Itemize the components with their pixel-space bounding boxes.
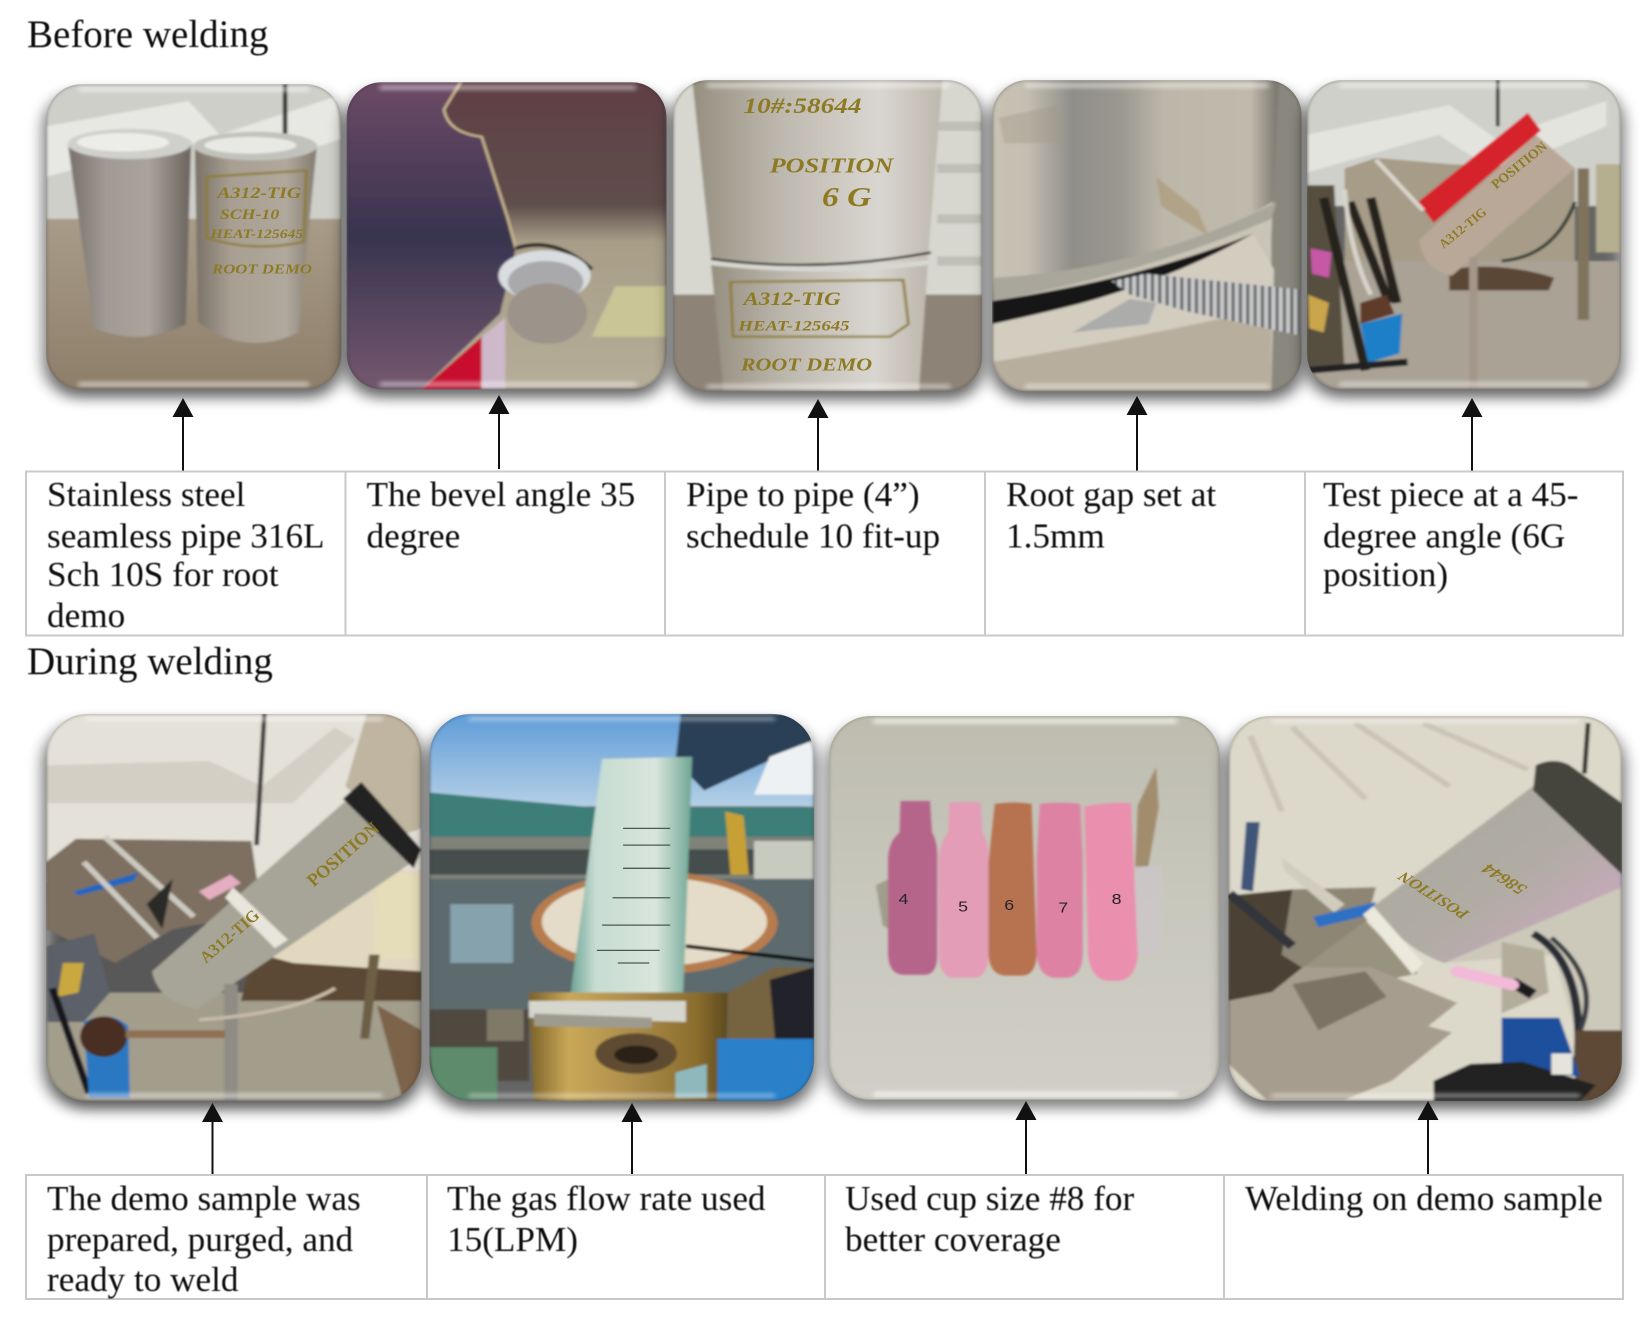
photo: ceramic cups 4 to 8	[827, 716, 1222, 1108]
cell: welding on demo	[1224, 1175, 1623, 1299]
cell: bevel angle	[346, 472, 665, 636]
cell: root gap: 1.5mm	[1006, 516, 1105, 556]
table: during welding captions	[26, 1175, 1623, 1299]
cell: cup size: Used cup size #8 for	[845, 1179, 1135, 1218]
arrow: cup size	[1016, 1101, 1036, 1174]
cell: stainless steel pipe: seamless pipe 316L	[47, 516, 325, 556]
arrow: demo sample	[202, 1103, 223, 1175]
arrow: fit-up	[808, 399, 828, 471]
table: before welding captions	[26, 472, 1623, 636]
photo: welding on demo sample	[1226, 716, 1624, 1109]
photo: demo sample prepared: POSITION	[301, 819, 387, 891]
photo: pipe to pipe fit-up: HEAT-125645	[737, 317, 850, 334]
cell: cup size: better coverage	[845, 1220, 1061, 1259]
cell: fit-up: Pipe to pipe (4”)	[686, 475, 920, 514]
cell: bevel angle: degree	[366, 516, 460, 556]
photo: stainless steel pipes	[44, 84, 343, 398]
cell: gas flow rate: The gas flow rate used	[447, 1179, 766, 1218]
cell: stainless steel pipe: Stainless steel	[47, 475, 246, 514]
cell: fit-up: schedule 10 fit-up	[686, 516, 940, 556]
arrow: root gap	[1126, 396, 1148, 471]
photo: ceramic cups 4 to 8: 6	[1004, 898, 1014, 914]
photo: ceramic cups 4 to 8: 8	[1112, 892, 1122, 908]
arrow: pipes	[172, 398, 194, 471]
photo: bevel angle gauge	[345, 82, 669, 398]
cell: cup size	[825, 1175, 1224, 1299]
photo: pipe to pipe fit-up: ROOT DEMO	[740, 355, 872, 375]
photo: pipe to pipe fit-up: 6 G	[822, 182, 871, 212]
cell: gas flow rate	[427, 1175, 825, 1299]
photo: stainless steel pipes: ROOT DEMO	[211, 262, 312, 277]
photo: pipe to pipe fit-up: POSITION	[769, 155, 894, 178]
arrow: bevel	[488, 395, 510, 469]
cell: stainless steel pipe	[26, 472, 346, 636]
cell: welding on demo: Welding on demo sample	[1245, 1179, 1603, 1218]
photo: pipe to pipe fit-up: 10#:58644	[744, 94, 861, 118]
photo: test piece at 45 degrees	[1305, 80, 1623, 398]
cell: demo sample: ready to weld	[47, 1260, 239, 1299]
photo: stainless steel pipes: HEAT-125645	[209, 227, 303, 241]
photo: demo sample prepared: A312-TIG	[194, 907, 265, 966]
photo: ceramic cups 4 to 8: 7	[1058, 900, 1068, 916]
photo: test piece at 45 degrees: POSITION	[1487, 139, 1553, 192]
photo: pipe to pipe fit-up: A312-TIG	[741, 288, 841, 310]
cell: gas flow rate: 15(LPM)	[447, 1220, 578, 1259]
photo: root gap with gauge	[990, 80, 1304, 400]
photo: gas flow meter	[427, 714, 816, 1109]
photo: ceramic cups 4 to 8: 5	[958, 899, 968, 915]
arrow: gas flow	[622, 1103, 642, 1175]
photo: welding on demo sample: 58644	[1478, 860, 1531, 898]
cell: bevel angle: The bevel angle 35	[366, 475, 635, 514]
photo: stainless steel pipes: SCH-10	[220, 207, 279, 222]
cell: fit-up	[665, 472, 985, 636]
photo: welding on demo sample: POSITION	[1394, 867, 1474, 922]
heading: During welding: During welding	[27, 640, 273, 683]
cell: test piece	[1305, 472, 1623, 636]
cell: demo sample: prepared, purged, and	[47, 1220, 354, 1259]
cell: demo sample	[26, 1175, 427, 1299]
photo: ceramic cups 4 to 8: 4	[898, 892, 908, 908]
cell: demo sample: The demo sample was	[47, 1179, 361, 1218]
cell: test piece: degree angle (6G	[1323, 516, 1565, 556]
photo: stainless steel pipes: A312-TIG	[216, 184, 301, 201]
heading: Before welding: Before welding	[27, 13, 269, 56]
arrow: test piece	[1462, 398, 1482, 473]
photo: test piece at 45 degrees: A312-TIG	[1434, 205, 1490, 251]
cell: stainless steel pipe: Sch 10S for root	[47, 555, 279, 594]
cell: stainless steel pipe: demo	[47, 596, 125, 635]
arrow: welding	[1418, 1101, 1438, 1174]
cell: root gap	[985, 472, 1305, 636]
cell: test piece: position)	[1323, 555, 1448, 594]
cell: root gap: Root gap set at	[1006, 475, 1216, 514]
photo: demo sample prepared	[44, 714, 424, 1109]
photo: pipe to pipe fit-up	[671, 80, 984, 400]
cell: test piece: Test piece at a 45-	[1323, 475, 1578, 514]
